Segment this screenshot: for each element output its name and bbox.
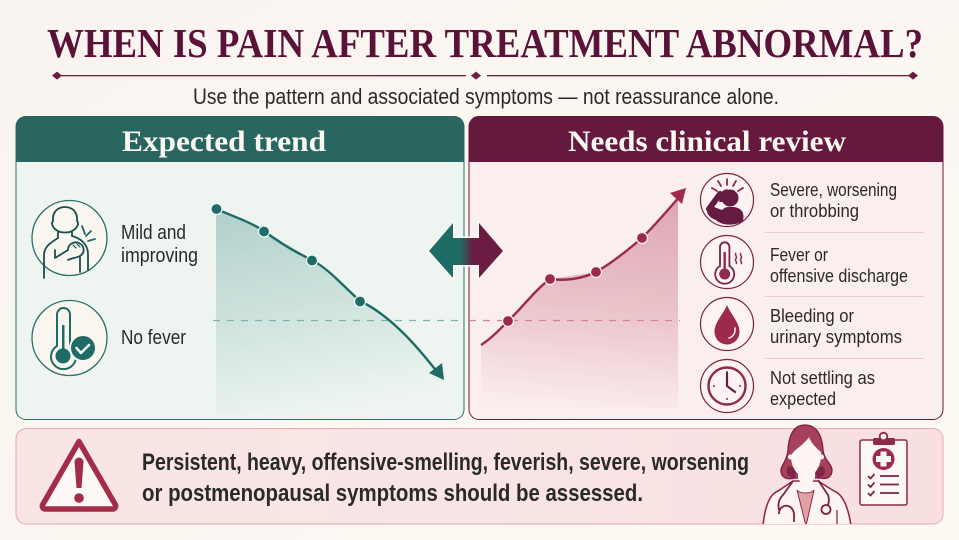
icon: thermometer xyxy=(700,236,754,288)
text: fever or offensive discharge: Fever or xyxy=(770,245,828,265)
icon: clock xyxy=(700,360,754,412)
subtitle: Use the pattern and associated symptoms — not reassurance alone. xyxy=(193,84,779,109)
callout text: Persistent, heavy, offensive-smelling, feverish, severe, worsening xyxy=(142,449,749,476)
heading: needs clinical review: Needs clinical review xyxy=(568,125,846,158)
chart: falling pain trend xyxy=(211,204,464,415)
panel: expected trend xyxy=(16,116,464,420)
icon: blood drop xyxy=(700,298,754,350)
label: no fever: No fever xyxy=(121,327,186,349)
panel: needs clinical review xyxy=(469,116,943,420)
icon: thermometer with check xyxy=(32,300,107,376)
callout banner xyxy=(16,425,943,526)
label: mild and improving: Mild and xyxy=(121,222,186,244)
icon: person holding shoulder xyxy=(32,200,107,278)
title divider xyxy=(52,72,918,80)
icon: severe headache xyxy=(700,174,754,226)
text: bleeding or urinary symptoms: urinary symptoms xyxy=(770,327,902,347)
heading: expected trend: Expected trend xyxy=(122,125,326,158)
panel header: needs clinical review xyxy=(469,116,943,162)
text: bleeding or urinary symptoms: Bleeding or xyxy=(770,306,854,326)
icon: warning triangle xyxy=(42,442,116,509)
icon: doctor xyxy=(763,425,851,526)
text: severe, worsening or throbbing: or throbbing xyxy=(770,201,859,221)
text: not settling as expected: expected xyxy=(770,389,836,409)
callout text: or postmenopausal symptoms should be assessed. xyxy=(142,480,643,507)
text: severe, worsening or throbbing: Severe, worsening xyxy=(770,180,897,200)
icon: double-headed arrow xyxy=(429,223,503,278)
icon: clipboard xyxy=(860,433,907,505)
text: fever or offensive discharge: offensive discharge xyxy=(770,266,908,286)
text: not settling as expected: Not settling as xyxy=(770,368,875,388)
label: mild and improving: improving xyxy=(121,245,198,267)
chart: rising pain trend xyxy=(469,188,686,408)
panel header: expected trend xyxy=(16,116,464,162)
